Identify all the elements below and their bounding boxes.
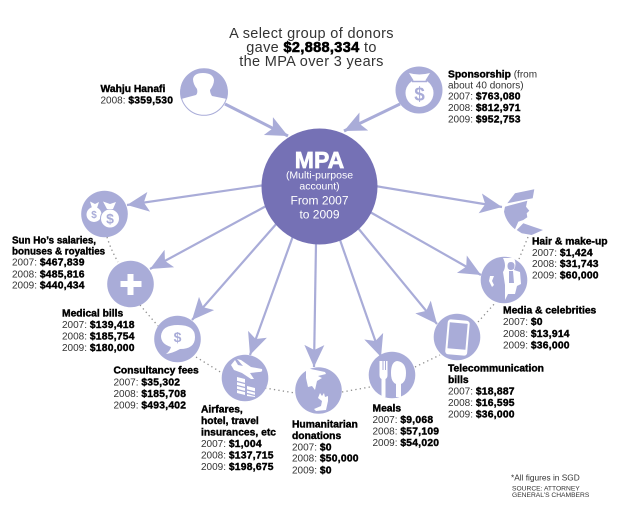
label: Media and celebrities: [503, 306, 597, 352]
label: Airfares: 2008: $137,715: [201, 450, 274, 462]
label: Wahju Hanafi: 2008: $359,530: [100, 96, 173, 106]
arrow: MPA to airfares: [250, 236, 293, 355]
label: Consultancy fees: Consultancy fees: [114, 366, 199, 376]
arrow: MPA to salaries: [127, 185, 265, 205]
label: Medical bills: 2007: $139,418: [62, 320, 135, 331]
arrow: Wahju Hanafi to MPA: [225, 104, 288, 136]
arrow: MPA to medical: [150, 205, 268, 269]
MPA central circle: (Multi-purpose: [286, 170, 353, 182]
label: Media and celebrities: Media & celebrities: [503, 306, 597, 316]
label: Consultancy fees: [114, 366, 199, 412]
title: the MPA over 3 years: [239, 54, 384, 70]
footnote and source: [511, 472, 590, 499]
label: Media and celebrities: 2009: $36,000: [503, 340, 570, 352]
label: Wahju Hanafi: [100, 84, 173, 106]
label: Airfares: [201, 404, 276, 473]
icon: money bag: $: [414, 84, 425, 106]
label: Consultancy fees: 2009: $493,402: [114, 400, 186, 412]
label: Hair and make-up: [532, 236, 608, 282]
MPA central circle: account): [299, 180, 340, 192]
arrow: MPA to hair: [375, 186, 502, 207]
MPA central circle: MPA: [295, 147, 344, 173]
label: Medical bills: Medical bills: [62, 308, 124, 320]
label: Sun Ho's salaries: 2008: $485,816: [12, 270, 85, 280]
label: Airfares: hotel, travel: [201, 416, 259, 427]
icon: medical cross: [107, 261, 154, 307]
arrow: MPA to humanitarian: [314, 243, 316, 367]
icon: two money bags: [81, 191, 128, 237]
label: Medical bills: 2008: $185,754: [62, 332, 135, 342]
icon: media people: [481, 257, 527, 303]
label: Hair and make-up: Hair & make-up: [532, 236, 608, 248]
label: Meals: [372, 404, 439, 449]
icon: person: [180, 69, 228, 115]
label: Airfares: 2009: $198,675: [201, 462, 274, 473]
arrow: MPA to media: [370, 212, 481, 275]
title: A select group of donors: [229, 26, 394, 42]
label: Meals: 2007: $9,068: [372, 415, 433, 426]
MPA central circle: From 2007: [290, 194, 349, 208]
label: Telecommunication bills: Telecommunication: [448, 364, 544, 374]
label: Media and celebrities: 2008: $13,914: [503, 329, 570, 340]
label: Medical bills: [62, 308, 135, 354]
icon: fork and spoon: [369, 352, 415, 398]
label: Humanitarian donations: donations: [292, 431, 341, 442]
icon: two money bags: $: [91, 210, 97, 221]
arrow: MPA to consultancy: [192, 222, 278, 320]
label: Wahju Hanafi: Wahju Hanafi: [100, 84, 165, 95]
title: [229, 26, 394, 70]
icon: plane and hotel: [222, 355, 268, 401]
icon: speech bubble dollar: [154, 316, 201, 362]
icon: money bag: [396, 66, 442, 114]
label: Sun Ho's salaries: 2009: $440,434: [12, 280, 85, 292]
arrow: MPA to telecom: [358, 228, 437, 324]
label: Airfares: insurances, etc: [201, 428, 276, 438]
label: Humanitarian donations: 2009: $0: [292, 466, 332, 476]
label: Sponsorship: 2009: $952,753: [448, 114, 521, 126]
footnote and source: SOURCE: ATTORNEY: [512, 486, 580, 492]
label: Sun Ho's salaries: Sun Ho’s salaries,: [12, 236, 96, 246]
label: Telecommunication bills: bills: [448, 375, 469, 386]
dotted ring connecting categories: [107, 237, 528, 393]
footnote and source: GENERAL’S CHAMBERS: [512, 492, 590, 499]
label: Airfares: Airfares,: [201, 404, 243, 416]
label: Medical bills: 2009: $180,000: [62, 343, 135, 354]
MPA central circle: to 2009: [299, 208, 340, 222]
footnote and source: *All figures in SGD: [511, 472, 580, 482]
label: Humanitarian donations: 2007: $0: [292, 442, 332, 454]
label: Consultancy fees: 2008: $185,708: [114, 389, 186, 400]
label: Sun Ho's salaries: 2007: $467,839: [12, 258, 85, 268]
label: Consultancy fees: 2007: $35,302: [114, 378, 180, 388]
title: gave $2,888,334 to: [246, 40, 377, 56]
label: Sponsorship: 2007: $763,080: [448, 92, 521, 102]
icon: helping hands: [295, 367, 342, 414]
label: Sponsorship: [448, 70, 537, 126]
arrow: Sponsorship to MPA: [344, 104, 400, 131]
label: Sponsorship: Sponsorship (from: [448, 70, 537, 80]
label: Humanitarian donations: [292, 420, 359, 476]
label: Airfares: 2007: $1,004: [201, 439, 262, 450]
MPA central circle: [262, 128, 378, 244]
label: Humanitarian donations: 2008: $50,000: [292, 454, 359, 464]
label: Hair and make-up: 2007: $1,424: [532, 248, 593, 259]
label: Media and celebrities: 2007: $0: [503, 317, 543, 328]
label: Sponsorship: 2008: $812,971: [448, 103, 521, 114]
label: Hair and make-up: 2008: $31,743: [532, 259, 599, 270]
label: Sun Ho's salaries: bonuses & royalties: [12, 246, 106, 258]
arrow: MPA to meals: [340, 240, 381, 357]
label: Telecommunication bills: 2007: $18,887: [448, 386, 515, 398]
label: Telecommunication bills: [448, 364, 544, 420]
label: Telecommunication bills: 2008: $16,595: [448, 398, 515, 409]
label: Humanitarian donations: Humanitarian: [292, 420, 358, 430]
icon: speech bubble dollar: $: [174, 329, 182, 345]
label: Telecommunication bills: 2009: $36,000: [448, 410, 515, 420]
icon: hair and make-up face: [504, 189, 543, 235]
label: Meals: Meals: [372, 404, 401, 414]
label: Sun Ho's salaries: [12, 236, 106, 292]
label: Meals: 2008: $57,109: [372, 426, 439, 438]
label: Meals: 2009: $54,020: [372, 438, 439, 449]
icon: two money bags: $: [106, 210, 114, 226]
label: Hair and make-up: 2009: $60,000: [532, 270, 599, 282]
icon: smartphone: [434, 314, 480, 360]
label: Sponsorship: about 40 donors): [448, 80, 524, 92]
